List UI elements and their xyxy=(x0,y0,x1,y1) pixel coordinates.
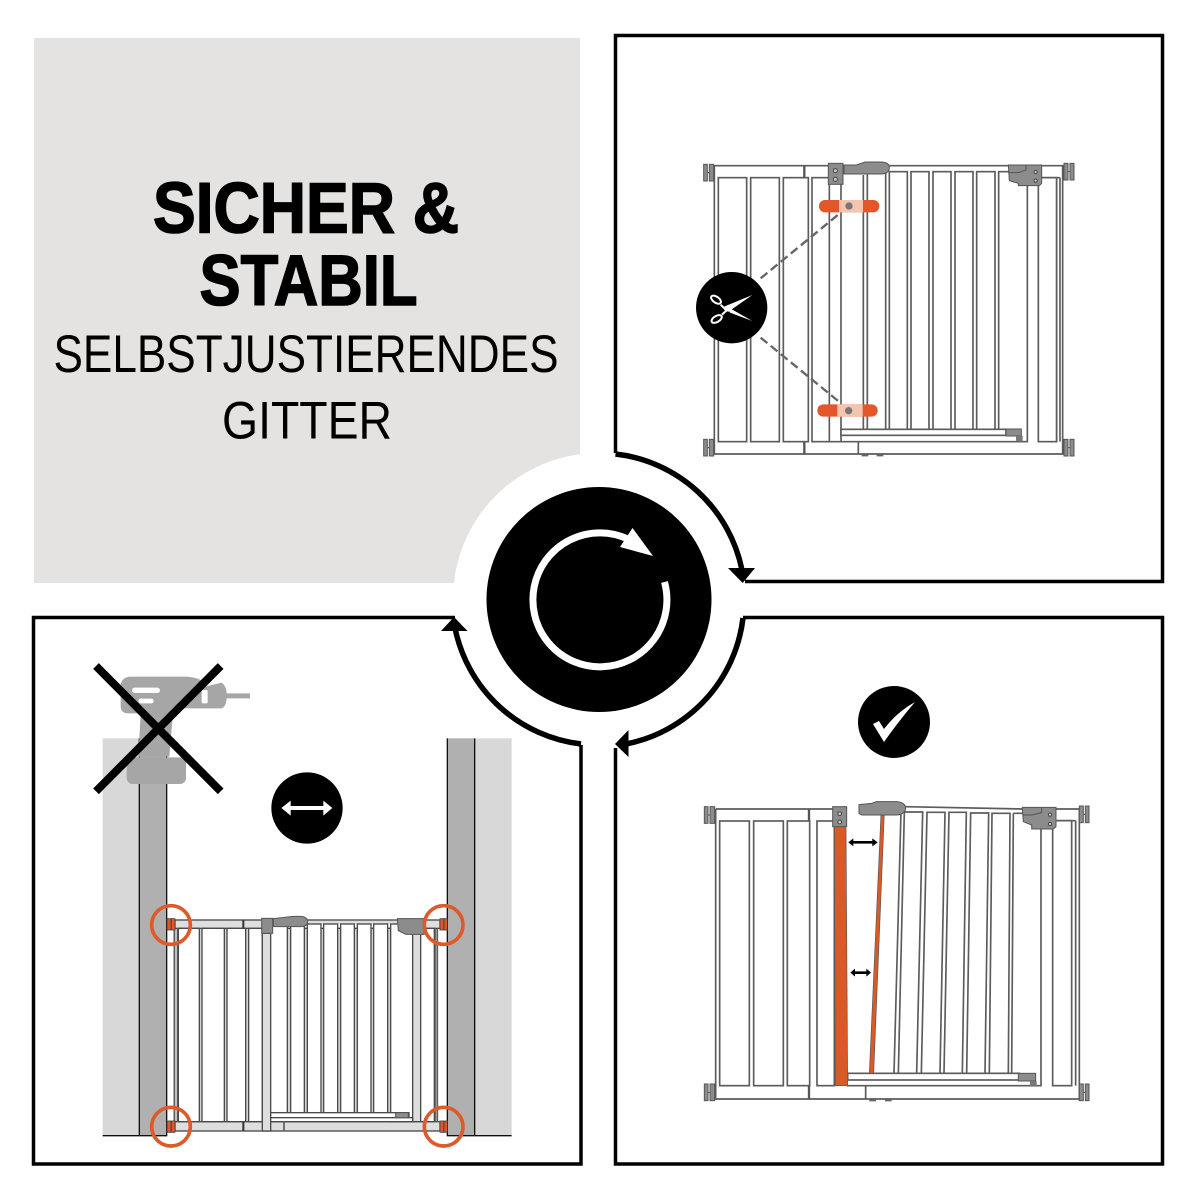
heading: title text: SICHER & xyxy=(153,170,459,248)
illustration: bottom left, pressure mount step xyxy=(96,666,512,1146)
orange tilted gate post xyxy=(869,813,884,1073)
icon: orange tape strips xyxy=(817,200,879,417)
icon: latch xyxy=(1006,165,1042,441)
gate: top right, scissors step xyxy=(696,162,1074,456)
panel frame: bottom right with arrow xyxy=(615,618,1162,1164)
arrow: gap top xyxy=(848,838,878,846)
icon: check mark badge xyxy=(858,686,930,758)
center icon: rotation arrow xyxy=(486,487,712,712)
icon: double arrow badge xyxy=(271,772,343,844)
icon: orange highlight circles xyxy=(152,906,463,1146)
icon: hinge and handle xyxy=(828,162,889,184)
panel: title background xyxy=(34,38,580,583)
dashed leader lines xyxy=(761,214,839,402)
heading: title text xyxy=(54,170,558,450)
orange post xyxy=(834,827,848,1086)
panel frame: top right with arrow xyxy=(616,36,1162,583)
walls xyxy=(103,738,512,1136)
heading: title text: STABIL xyxy=(200,242,418,321)
icon: wall feet xyxy=(704,163,1074,456)
heading: title text: SELBSTJUSTIERENDES xyxy=(54,325,558,384)
heading: title text: GITTER xyxy=(222,392,392,450)
gate: bottom right, self-adjusting step xyxy=(704,802,1089,1101)
icon: drill xyxy=(121,677,250,784)
gate: installed between walls xyxy=(174,916,440,1131)
panel frame: bottom left with arrow xyxy=(34,617,581,1164)
icon: wall feet xyxy=(704,806,1089,1101)
icon: orange wall pads xyxy=(167,919,447,1132)
center white disc xyxy=(453,453,745,745)
arrow: gap middle xyxy=(850,969,871,977)
icon: gate hardware xyxy=(833,802,1056,1086)
icon: crossed out xyxy=(96,666,221,791)
icon: scissors xyxy=(696,272,767,343)
